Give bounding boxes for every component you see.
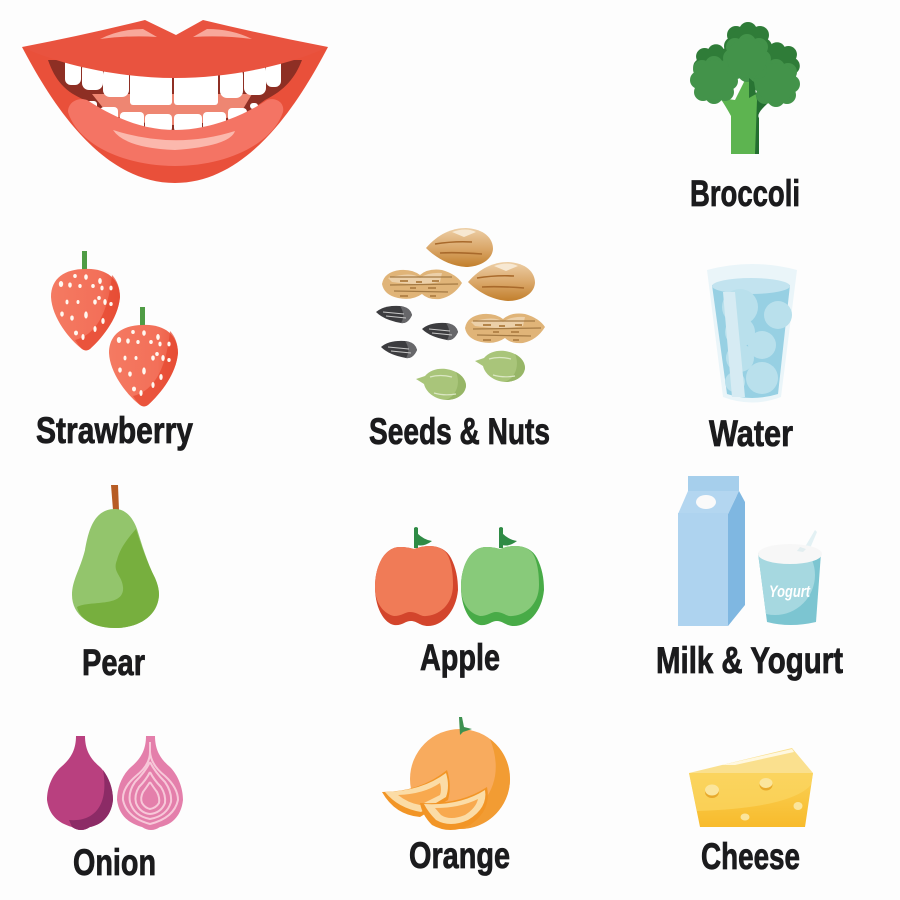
icon: yogurt cup: Yogurt bbox=[769, 582, 811, 601]
panel: milk and yogurt bbox=[656, 476, 843, 681]
panel: seeds and nuts bbox=[369, 228, 550, 452]
panel: orange bbox=[382, 717, 510, 876]
panel: strawberry bbox=[36, 251, 193, 451]
panel: onion bbox=[47, 736, 183, 883]
label: Water: Water bbox=[709, 413, 793, 454]
label: Strawberry: Strawberry bbox=[36, 410, 193, 451]
panel: cheese bbox=[689, 748, 813, 877]
icon: milk carton bbox=[678, 476, 745, 626]
icon: whole and halved red onion bbox=[47, 736, 183, 830]
label: Cheese: Cheese bbox=[701, 836, 800, 877]
panel: pear bbox=[72, 485, 159, 683]
label: Seeds & Nuts: Seeds & Nuts bbox=[369, 411, 550, 452]
label: Broccoli: Broccoli bbox=[690, 173, 800, 214]
label: Milk & Yogurt: Milk & Yogurt bbox=[656, 640, 843, 681]
icon: cheese wedge bbox=[689, 748, 813, 827]
icon: broccoli bbox=[690, 22, 800, 154]
label: Pear: Pear bbox=[82, 642, 145, 683]
icon: yogurt cup bbox=[758, 530, 821, 625]
panel: apple bbox=[375, 527, 544, 678]
icon: strawberries bbox=[51, 251, 178, 406]
icon: smiling mouth bbox=[22, 20, 328, 183]
panel: water bbox=[707, 264, 797, 454]
label: Onion: Onion bbox=[73, 842, 156, 883]
icon: pear bbox=[72, 485, 159, 628]
label: Apple: Apple bbox=[420, 637, 500, 678]
label: Orange: Orange bbox=[409, 835, 510, 876]
icon: glass of water bbox=[707, 264, 797, 402]
icon: seeds and nuts bbox=[376, 228, 545, 400]
panel: broccoli bbox=[690, 22, 800, 214]
icon: red and green apples bbox=[375, 527, 544, 626]
icon: orange with slices bbox=[382, 717, 510, 830]
